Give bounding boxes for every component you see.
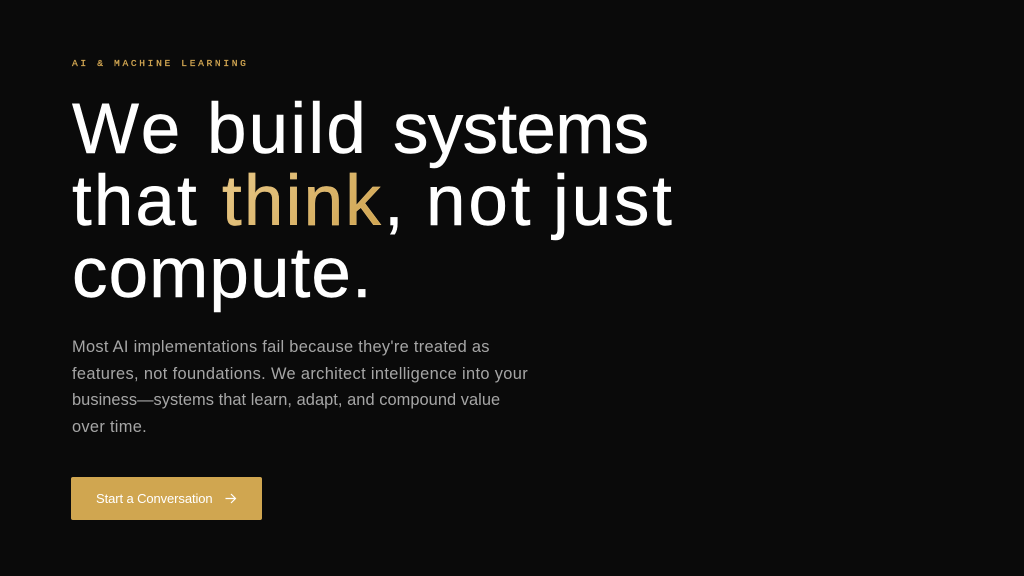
description text: business—systems that learn, adapt, and compound value [72, 391, 500, 409]
call to action button [71, 477, 262, 520]
title: compute. [72, 234, 373, 313]
title: think [222, 162, 383, 241]
eyebrow label: AI & MACHINE LEARNING [72, 58, 249, 69]
title: build [207, 90, 368, 169]
title: that [72, 162, 199, 241]
description text: features, not foundations. We architect intelligence into your [72, 364, 528, 382]
title: , [384, 162, 404, 241]
description text [72, 338, 528, 436]
title: systems [393, 90, 648, 169]
title: just [553, 162, 675, 241]
title: not [426, 162, 533, 241]
icon: arrow [226, 494, 236, 504]
title: We [72, 90, 183, 169]
description text: Most AI implementations fail because they're treated as [72, 338, 490, 356]
description text: over time. [72, 418, 147, 436]
button label: Start a Conversation [96, 491, 213, 506]
title [72, 90, 675, 313]
